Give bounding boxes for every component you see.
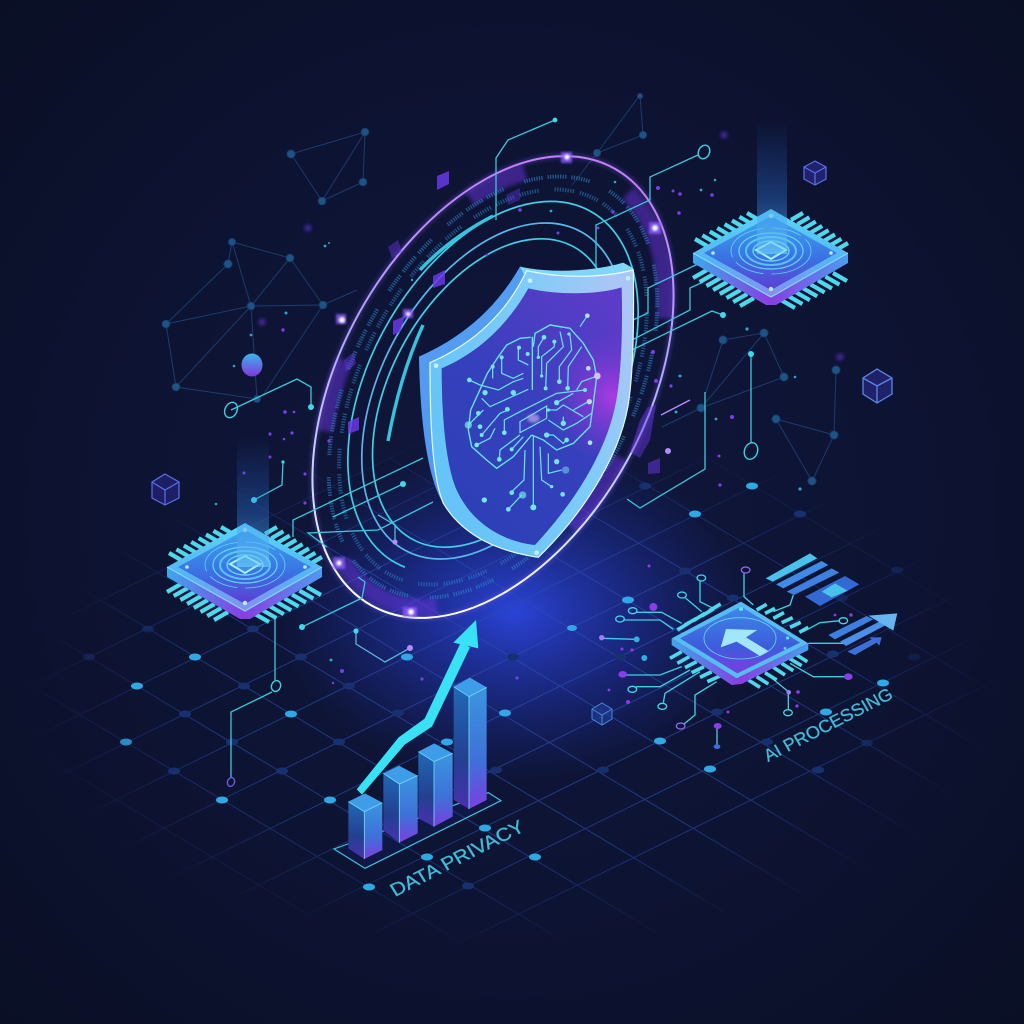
bar 4 [454, 678, 487, 809]
network: upper left constellation [287, 128, 369, 205]
shield panel purple glow [442, 287, 622, 545]
rising arrow [357, 620, 478, 795]
sphere icon [242, 354, 262, 376]
ring: outer glow [238, 94, 748, 680]
floating particles [215, 132, 843, 684]
central blue glow [275, 442, 755, 782]
shield with brain [419, 263, 634, 557]
network: left constellation [162, 238, 357, 402]
arrows icon [828, 613, 897, 655]
ring: blurred purple halo bands [250, 108, 736, 666]
chip pins [693, 213, 848, 308]
circuit end nodes [222, 118, 760, 787]
shield panel [442, 287, 622, 545]
network: top constellation [572, 94, 647, 185]
light beam [237, 435, 269, 567]
network: right constellation [662, 329, 840, 485]
small particles near AI chip [608, 564, 853, 714]
cube: small lower [592, 703, 612, 725]
label: data privacy: DATA PRIVACY [387, 817, 528, 901]
holographic rings [238, 94, 748, 680]
brain circuits [468, 316, 597, 509]
up-left arrow [721, 629, 768, 656]
shield side wall [419, 267, 538, 557]
ring: purple panels [344, 171, 660, 474]
chip: upper right with beam [693, 118, 848, 308]
ring: cyan inner rings [288, 152, 698, 622]
light beam [757, 118, 787, 254]
shield corner rivets [434, 276, 630, 555]
ring: sparkles [333, 152, 661, 617]
chip: left with beam [167, 435, 322, 622]
chip body [693, 209, 848, 305]
label: AI processing: AI PROCESSING [760, 684, 896, 765]
shield top edge [520, 263, 633, 280]
chart base [334, 793, 501, 868]
chip dots [739, 607, 789, 650]
bar 3 [418, 743, 453, 827]
cube: top right [804, 161, 826, 185]
bar 1 [348, 793, 382, 859]
bar chart: data privacy [334, 620, 501, 868]
pins [670, 604, 808, 687]
trace ends [599, 567, 853, 749]
traces [602, 573, 848, 747]
brain central chip [520, 406, 547, 433]
brain outline [468, 325, 597, 468]
chip top [680, 607, 800, 673]
stripes icon [766, 553, 859, 606]
chip body [167, 523, 322, 619]
ring: data strips [261, 120, 725, 654]
shield rim [430, 270, 634, 557]
brain nodes [465, 313, 601, 512]
cube: left [152, 474, 179, 505]
isometric floor grid [20, 425, 1000, 955]
circuit traces around rings [231, 120, 751, 778]
chip circle [704, 618, 776, 659]
chip sides [672, 638, 808, 685]
chip pins [167, 527, 322, 622]
ring: outer line [238, 94, 748, 680]
chip rim [672, 602, 808, 678]
ring: thick arcs [388, 216, 493, 441]
bar 2 [383, 766, 418, 843]
cube: right [863, 369, 892, 403]
AI processing chip module [599, 553, 897, 749]
